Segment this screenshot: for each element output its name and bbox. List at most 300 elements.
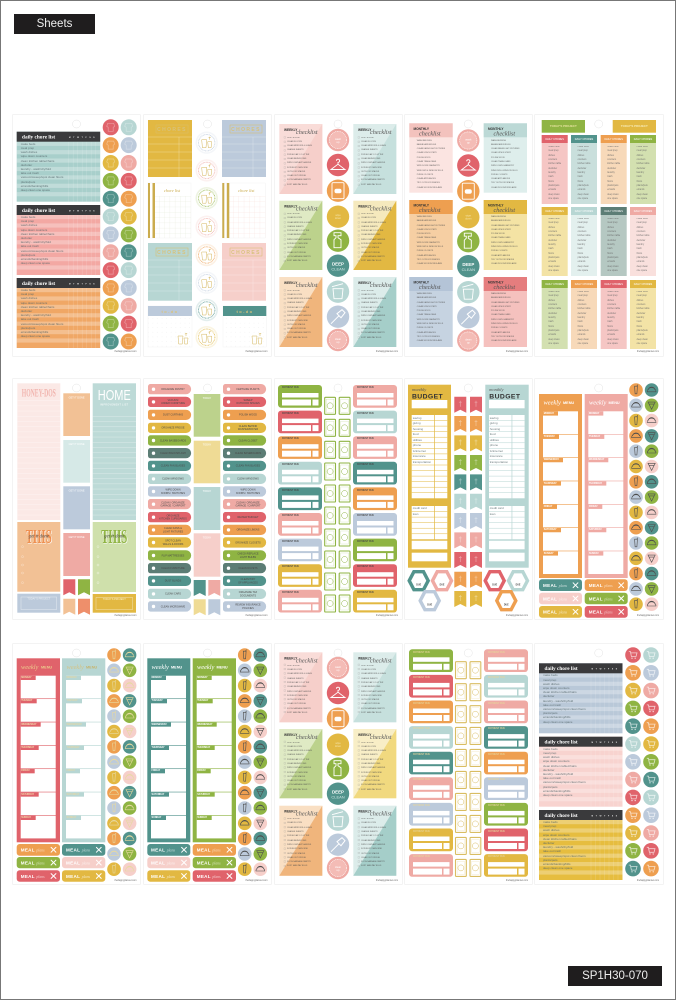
right pill labels: ORGANIZE TAX [239,591,258,594]
heading tag: Sheets: Sheets [37,18,72,30]
day labels: red: MONDAY TUESDAY WEDNESDAY THURSDAY FRIDAY SATURDAY SUNDAY [21,676,37,819]
checklist: teal [353,277,396,347]
stickers column: DEEP [332,262,344,266]
center today tags: TODAY [203,444,212,447]
artwork [16,648,137,882]
stickers column: clean [335,337,342,341]
daily chores columns: row 3: DAILY CHORES [634,283,653,286]
left pill labels: CLEAN FAN BLADES [161,465,186,468]
checklist: yellow: checklist [370,734,392,741]
chore list: light pink [539,737,622,807]
chore list: pink: MTWTFSS [69,210,97,212]
daily chores columns: row 3: DAILY CHORES [575,283,594,286]
stickers column: wash [465,138,472,142]
stickers column: CLEAN [331,794,345,800]
right pill labels: LIGHT BULBS [240,556,256,559]
panel: teal budget: BUDGET [489,394,521,401]
menu panel: light teal: MENU [86,666,97,670]
meal plans labels: MEAL plans [21,874,45,879]
checklist: light teal [484,123,527,193]
stickers column: up [467,142,470,144]
panel: teal chores: CHORES [157,250,187,256]
meal plans labels: MEAL plans [66,860,90,866]
checklist: yellow: checklist [370,206,392,213]
right pill labels: KNOBS / SWITCHES [236,492,260,495]
daily list text: row 1 column 1: make beds meal prep dishes counters kitchen table declutter laundry trash floors plants/pets errands deep clean one space [548,146,561,200]
checklist text: teal: DUST HOUSE CLEAN FLOORS CLEAN MIRRORS & GLASS CHANGE SHEETS PURGE DAILY CLUTTER CLEAN BATHROOMS WIPE DOWN APPLIANCES SCRUB KITCHEN SINK OUTDOOR SPACES CLEAN OUT FRIDGE FOOD/GARBAGE PANTRY SORT MAIL/PAY BILLS [361,818,386,867]
menu panel: teal: weekly [152,664,169,671]
panel: home: IMPROVEMENT LIST [100,404,129,406]
left pill labels: CLEAN / ORGANIZE [161,501,185,504]
hexagon due stickers: DUE [504,604,509,606]
checklist text: red: WASH BEDDING BASEBOARDS/RUGS CLEAN FANS/LIGHT FIXTURES CLEAN UPHOLSTERY POLISH WOOD CLEAN TRASH CANS WIPE DOWN CABINETRY WINDOWS & WINDOW SILLS PURGE CLOSETS CLEAN APPLIANCES TIDY OUTDOOR SPACES CLEAN WOODWORK/LAWN [491,293,519,342]
daily list text: row 3 column 4: make beds meal prep dishes counters kitchen table declutter laundry trash floors plants/pets errands deep clean one space [637,291,650,345]
daily chores columns: row 1: DAILY CHORES [605,138,623,141]
checklist text: yellow: WASH BEDDING BASEBOARDS/RUGS CLEAN FANS/LIGHT FIXTURES CLEAN UPHOLSTERY POLISH WOOD CLEAN TRASH CANS WIPE DOWN CABINETRY WINDOWS & WINDOW SILLS PURGE CLOSETS CLEAN APPLIANCES TIDY OUTDOOR SPACES CLEAN WOODWORK/LAWN [491,216,519,265]
artwork: thehappyplanner.com [506,614,528,617]
menu panel: green [193,658,236,842]
stickers column: clean [335,865,342,869]
checklist: teal: checklist [370,811,392,818]
checklist: orange: checklist [296,282,318,289]
stickers column: wipe [335,741,341,745]
daily list text: row 3 column 2: make beds meal prep dishes counters kitchen table declutter laundry trash floors plants/pets errands deep clean one space [578,291,590,345]
payment cards [278,385,397,612]
sheet 11: weekly menu red and light teal with gold [13,644,140,884]
right pill labels: CLEAN BASEBOARDS [235,452,261,455]
checklist: pink [279,124,322,194]
meal plans labels: MEAL plans [589,583,613,588]
checklist: light teal [353,124,396,194]
right pill labels: ORGANIZE CLOSETS [235,541,261,544]
checklist text: orange: WASH BEDDING BASEBOARDS/RUGS CLEAN FANS/LIGHT FIXTURES CLEAN UPHOLSTERY POLISH WOOD CLEAN TRASH CANS WIPE DOWN CABINETRY WINDOWS & WINDOW SILLS PURGE CLOSETS CLEAN APPLIANCES TIDY OUTDOOR SPACES CLEAN WOODWORK/LAWN [417,216,445,265]
checklist: blue: MONTHLY [414,281,430,285]
chore text: pink list: make beds meal prep wash dishes wipe down counters clean kitchen table/chairs declutter laundry - wash/dry/fold take out trash vacuum/sweep/spot clean floors plants/pets errands/banking/bills deep clean one space [543,747,586,797]
gold money tickets [456,662,481,876]
meal stickers [238,648,267,876]
menu panel: light teal: weekly [66,664,84,671]
artwork: thehappyplanner.com [246,879,268,882]
chore list: pink: daily chore list [22,208,55,214]
panel: teal header dotted note: to-do [236,309,254,314]
checklist: orange [279,806,322,876]
meal plans labels: MEAL plans [21,848,45,853]
artwork: thehappyplanner.com [376,879,398,882]
artwork: thehappyplanner.com [506,879,528,882]
left pill labels: CLEAN BASEBOARDS [160,439,186,442]
daily chores columns: row 3: DAILY CHORES [546,283,564,286]
today's project labels: TODAY'S PROJECT [550,124,577,128]
checklist: green: checklist [296,734,318,741]
checklist: light teal: checklist [370,657,392,664]
sheet 5: today's project and daily chores columns [535,115,662,356]
left pill labels: CLEAN CARS [165,593,181,596]
right pill labels: CLEAN DUVETS [238,567,258,570]
checklist: orange: MONTHLY [414,204,430,208]
checklist: yellow: checklist [494,207,515,214]
left pill labels: CLEAN FANS & [164,527,182,530]
sheet 13: weekly checklists, second set [275,644,402,884]
checklist: pink: checklist [419,130,441,138]
artwork [539,383,659,618]
left pill labels: WALLS & DOORS [163,543,184,546]
left pill labels: ORGANIZE FRIDGE [161,427,185,430]
sheet 1: daily chore lists with stickers [13,115,140,356]
stickers column: DEEP [332,790,344,794]
budget items: teal: saving giving housing food utilities phone tv/internet insurance transportation [490,416,508,464]
checklist text: yellow: DUST HOUSE CLEAN FLOORS CLEAN MIRRORS & GLASS CHANGE SHEETS PURGE DAILY CLUTTER CLEAN BATHROOMS WIPE DOWN APPLIANCES SCRUB KITCHEN SINK OUTDOOR SPACES CLEAN OUT FRIDGE FOOD/GARBAGE PANTRY SORT MAIL/PAY BILLS [361,213,386,262]
meal plans labels: MEAL plans [543,596,567,601]
right pill labels: REVIEW BUDGET [238,516,259,519]
panel: green this [93,522,136,592]
artwork: thehappyplanner.com [376,350,398,353]
sticker circles [103,119,137,350]
checklist text: orange: DUST HOUSE CLEAN FLOORS CLEAN MIRRORS & GLASS CHANGE SHEETS PURGE DAILY CLUTTER CLEAN BATHROOMS WIPE DOWN APPLIANCES SCRUB KITCHEN SINK OUTDOOR SPACES CLEAN OUT FRIDGE FOOD/GARBAGE PANTRY SORT MAIL/PAY BILLS [287,290,312,339]
stickers column: CLEAN [331,266,345,272]
meal plans labels: MEAL plans [543,610,567,615]
panel: yellow today's project [93,594,136,613]
artwork [279,120,398,353]
panel: pink grid chore list: chore list [238,188,255,193]
right pill labels: REVIEW INSURANCE [235,604,261,607]
left pill labels: KNOBS / SWITCHES [161,492,185,495]
right pill labels: POLICIES [242,607,254,610]
panel: honey-dos [17,383,60,520]
left pill labels: CLEAN MICROWAVE [161,605,186,608]
meal plans labels: MEAL plans [151,848,175,853]
chore list: teal [17,132,100,202]
artwork [542,120,659,353]
meal plans labels: MEAL plans [21,860,45,866]
artwork [279,648,398,882]
panel: orange this: THIS [26,526,52,548]
left pill labels: DUST CURTAINS [163,414,183,417]
left pill labels: CLEAN BACKSPLASH [160,452,186,455]
checklist: light teal: checklist [494,130,515,138]
right pill labels: WASHER/DRYER [238,428,258,431]
daily chores columns: row 2: DAILY CHORES [634,210,653,213]
left pill labels: WIPE DOWN [166,489,181,492]
left pill labels: LIGHT FIXTURES [163,530,184,533]
flag stickers [63,579,90,615]
checklist: orange [409,200,453,270]
checklist: teal: checklist [370,282,392,289]
right pill labels: OF APPLIANCES [238,581,258,584]
today's project labels: TODAY'S PROJECT [621,124,648,128]
left pill labels: CLEAN FURNITURE [161,567,185,570]
artwork: thehappyplanner.com [637,879,659,882]
menu panel: orange: weekly [544,400,561,406]
checklist text: blue: WASH BEDDING BASEBOARDS/RUGS CLEAN FANS/LIGHT FIXTURES CLEAN UPHOLSTERY POLISH WOOD CLEAN TRASH CANS WIPE DOWN CABINETRY WINDOWS & WINDOW SILLS PURGE CLOSETS CLEAN APPLIANCES TIDY OUTDOOR SPACES CLEAN WOODWORK/LAWN [417,293,445,342]
checklist: teal: WEEKLY [358,810,372,814]
chore text: yellow list: make beds meal prep wash dishes wipe down counters clean kitchen table/chairs declutter laundry - wash/dry/fold take out trash vacuum/sweep/spot clean floors plants/pets errands/banking/bills deep clean one space [543,820,586,870]
sheet 2: chores panels and round stickers [144,115,271,356]
menu panel: orange [539,394,582,578]
right pill labels: CLEAN/TIDY [241,578,256,581]
sheet 9: monthly budget [405,379,532,619]
checklist: red: MONTHLY [488,281,504,285]
checklist: blue [409,277,453,347]
payment labels: left: PAYMENT DUE PAYMENT DUE PAYMENT DUE PAYMENT DUE PAYMENT DUE PAYMENT DUE PAYMENT DUE PAYMENT DUE PAYMENT DUE [413,650,430,858]
daily chores columns: row 1: DAILY CHORES [634,138,653,141]
left pill labels: CLEAN WINDOWS [162,478,184,481]
artwork [17,383,137,617]
panel: yellow chores [148,120,192,177]
panel: blue today's project: TODAY'S PROJECT [27,598,51,600]
menu panel: pink: MENU [608,401,620,405]
checklist: green [279,729,322,798]
sheet 7: task pill labels [144,379,271,619]
panel: blue today's project [17,594,60,613]
checklist text: pink: DUST HOUSE CLEAN FLOORS CLEAN MIRRORS & GLASS CHANGE SHEETS PURGE DAILY CLUTTER CLEAN BATHROOMS WIPE DOWN APPLIANCES SCRUB KITCHEN SINK OUTDOOR SPACES CLEAN OUT FRIDGE FOOD/GARBAGE PANTRY SORT MAIL/PAY BILLS [287,136,312,186]
menu panel: light teal [62,658,105,842]
right pill labels: GARAGE / CARPORT [236,505,261,508]
checklist text: yellow: DUST HOUSE CLEAN FLOORS CLEAN MIRRORS & GLASS CHANGE SHEETS PURGE DAILY CLUTTER CLEAN BATHROOMS WIPE DOWN APPLIANCES SCRUB KITCHEN SINK OUTDOOR SPACES CLEAN OUT FRIDGE FOOD/GARBAGE PANTRY SORT MAIL/PAY BILLS [361,742,386,791]
product code tag: SP1H30-070 [582,970,648,982]
chore list: teal: MTWTFSS [69,137,97,139]
meal plans labels: MEAL plans [543,583,567,588]
get it done tags [63,393,90,576]
left pill labels [159,388,187,608]
artwork: thehappyplanner.com [115,879,137,882]
menu panel: red: MENU [41,666,52,670]
artwork: thehappyplanner.com [115,350,137,353]
chore list: teal: daily chore list [22,135,55,141]
stickers column: clean [465,338,472,342]
money tickets [325,397,350,612]
meal stickers with gold icons [107,648,136,876]
get it done tags: GET IT DONE [69,490,85,492]
sheet 10: weekly menu orange and pink [535,379,662,619]
left pill labels: SPOT CLEAN [165,540,181,543]
sheet 12: weekly menu teal and green [144,644,271,884]
left pill labels: ORGANIZE PANTRY [161,388,185,391]
debt items: teal: credit card loan [490,506,504,516]
checklist: green [279,201,322,270]
chore list: pink [17,205,100,275]
panel: green grid chore list: chore list [164,188,181,193]
checklist: orange: WEEKLY [284,810,298,814]
checklist text: pink: WASH BEDDING BASEBOARDS/RUGS CLEAN FANS/LIGHT FIXTURES CLEAN UPHOLSTERY POLISH WOOD CLEAN TRASH CANS WIPE DOWN CABINETRY WINDOWS & WINDOW SILLS PURGE CLOSETS CLEAN APPLIANCES TIDY OUTDOOR SPACES CLEAN WOODWORK/LAWN [417,140,445,189]
flag stickers [194,580,220,615]
panel: orange this: THIS [26,526,52,548]
checklist text: green: DUST HOUSE CLEAN FLOORS CLEAN MIRRORS & GLASS CHANGE SHEETS PURGE DAILY CLUTTER CLEAN BATHROOMS WIPE DOWN APPLIANCES SCRUB KITCHEN SINK OUTDOOR SPACES CLEAN OUT FRIDGE FOOD/GARBAGE PANTRY SORT MAIL/PAY BILLS [287,213,312,262]
panel: teal budget [485,385,529,568]
right pill labels: SWEEP [243,399,253,402]
stickers column: down [465,216,472,220]
right pill labels: OUTDOOR SPACES [236,402,260,405]
artwork [539,647,659,882]
checklist: pink: checklist [296,657,318,664]
checklist text: light teal: DUST HOUSE CLEAN FLOORS CLEAN MIRRORS & GLASS CHANGE SHEETS PURGE DAILY CLUTTER CLEAN BATHROOMS WIPE DOWN APPLIANCES SCRUB KITCHEN SINK OUTDOOR SPACES CLEAN OUT FRIDGE FOOD/GARBAGE PANTRY SORT MAIL/PAY BILLS [361,665,386,714]
meal plans labels: MEAL plans [197,860,221,866]
panel: green grid chore list [148,183,191,238]
chore list: light pink: MTWTFSS [592,742,620,744]
checklist: green: WEEKLY [284,733,298,737]
panel: blue chores [222,120,266,177]
panel: pink grid chore list [222,183,265,238]
daily chores columns: row 2 [542,207,656,276]
menu panel: red [17,658,60,842]
round gold stickers [196,132,218,348]
left pills [148,384,191,612]
panel: yellow today's project: TODAY'S PROJECT [103,598,126,601]
panel: teal chores [148,243,192,301]
hexagon due stickers: DUE [440,584,445,586]
stickers column: down [335,744,342,748]
checklist: light teal: WEEKLY [358,128,372,132]
meal plans labels [17,844,105,882]
checklist text: light teal: DUST HOUSE CLEAN FLOORS CLEAN MIRRORS & GLASS CHANGE SHEETS PURGE DAILY CLUTTER CLEAN BATHROOMS WIPE DOWN APPLIANCES SCRUB KITCHEN SINK OUTDOOR SPACES CLEAN OUT FRIDGE FOOD/GARBAGE PANTRY SORT MAIL/PAY BILLS [361,136,386,186]
daily chores columns: row 2: DAILY CHORES [546,210,564,213]
artwork: thehappyplanner.com [246,614,268,617]
center today tags: TODAY [203,397,212,400]
meal plans labels: MEAL plans [589,610,613,615]
panel: honey-dos: HONEY-DOS [22,386,56,400]
panel: yellow budget [408,385,451,568]
daily list text: row 2 column 1: make beds meal prep dishes counters kitchen table declutter laundry trash floors plants/pets errands deep clean one space [548,218,561,272]
right pill labels: CLEAN / ORGANIZE [236,501,260,504]
menu panel: pink: weekly [589,400,607,406]
panel: orange this [17,522,60,592]
payment labels: left: PAYMENT DUE PAYMENT DUE PAYMENT DUE PAYMENT DUE PAYMENT DUE PAYMENT DUE PAYMENT DUE PAYMENT DUE PAYMENT DUE [282,386,299,594]
meal stickers [629,383,658,611]
debt items: yellow: credit card loan [413,506,427,516]
panel: teal budget: monthly [489,387,503,392]
panel: yellow budget: BUDGET [412,394,444,401]
checklist: green: WEEKLY [284,205,298,209]
sheet 14: payment due cards with gold [405,644,532,884]
day labels: teal: MONDAY TUESDAY WEDNESDAY THURSDAY FRIDAY SATURDAY SUNDAY [152,676,167,819]
sheet 8: payment due cards [275,379,402,619]
artwork [148,120,268,353]
checklist: pink [409,123,453,193]
chore list: yellow: MTWTFSS [592,815,620,817]
checklist: orange: WEEKLY [284,281,298,285]
right pill labels: DOCUMENTS [240,594,256,597]
meal plans labels: MEAL plans [197,874,221,879]
chore list: blue [539,663,622,733]
daily chores columns: row 1 [542,135,656,204]
menu panel: pink [585,394,628,578]
stickers column: wipe [466,214,472,218]
right pill labels: CLEAN FAN BLADES [236,465,261,468]
chore text: pink list: make beds meal prep wash dishes wipe down counters clean kitchen table/chairs declutter laundry - wash/dry/fold take out trash vacuum/sweep/spot clean floors plants/pets errands/banking/bills deep clean one space [21,215,63,265]
cart stickers [625,647,659,876]
daily list text: row 2 column 3: make beds meal prep dishes counters kitchen table declutter laundry trash floors plants/pets errands deep clean one space [607,218,620,272]
checklist text: orange: DUST HOUSE CLEAN FLOORS CLEAN MIRRORS & GLASS CHANGE SHEETS PURGE DAILY CLUTTER CLEAN BATHROOMS WIPE DOWN APPLIANCES SCRUB KITCHEN SINK OUTDOOR SPACES CLEAN OUT FRIDGE FOOD/GARBAGE PANTRY SORT MAIL/PAY BILLS [287,818,312,867]
stickers column: wash [335,137,342,141]
chore text: teal list: make beds meal prep wash dishes wipe down counters clean kitchen table/chairs declutter laundry - wash/dry/fold take out trash vacuum/sweep/spot clean floors plants/pets errands/banking/bills deep clean one space [21,142,63,192]
left pill labels: UNDER FURNITURE [161,402,185,405]
hexagon due stickers: DUE [492,584,498,586]
artwork [16,119,137,353]
meal plans labels: MEAL plans [151,860,175,866]
chore list: blue: daily chore list [544,666,578,672]
daily list text: row 3 column 1: make beds meal prep dishes counters kitchen table declutter laundry trash floors plants/pets errands deep clean one space [548,291,561,345]
stickers column: up [337,669,340,672]
checklist: yellow [353,201,396,270]
get it done tags: GET IT DONE [69,536,85,539]
checklist: pink: MONTHLY [414,127,430,131]
payment cards [409,649,528,877]
right pill labels: POLISH WOOD [239,414,257,417]
left pill labels: ORGANIZE [166,514,180,517]
menu panel: green: weekly [197,664,215,671]
hexagon due stickers: DUE [516,584,521,586]
sheet 6: honey-dos and home [13,379,140,619]
chore text: orange list: make beds meal prep wash dishes wipe down counters clean kitchen table/chairs declutter laundry - wash/dry/fold take out trash vacuum/sweep/spot clean floors plants/pets errands/banking/bills deep clean one space [21,288,63,338]
get it done tags: GET IT DONE [69,396,85,400]
checklist: light teal: MONTHLY [488,127,504,131]
day labels: light teal: MONDAY TUESDAY WEDNESDAY THURSDAY FRIDAY SATURDAY SUNDAY [66,676,82,819]
meal plans labels: MEAL plans [151,874,175,879]
panel: yellow chores: CHORES [157,127,187,133]
stickers column: CLEAN [462,267,475,272]
daily chores columns: row 2: DAILY CHORES [605,210,623,213]
right pill labels: ORGANIZE LINENS [237,529,260,532]
panel: orange this: get it done [29,534,50,540]
stickers column: up [337,141,340,144]
panel: blue chores: CHORES [231,127,261,133]
sheet 15: daily chore lists with cart stickers [535,644,662,884]
artwork [147,648,268,882]
right pill labels [235,388,261,610]
panel: blue header dotted note [148,306,192,347]
menu panel: green: MENU [216,666,228,670]
center today tags: TODAY [203,536,212,539]
checklist: yellow: WEEKLY [358,733,372,737]
daily list text: row 1 column 2: make beds meal prep dishes counters kitchen table declutter laundry trash floors plants/pets errands deep clean one space [578,146,590,200]
artwork: thehappyplanner.com [637,614,659,617]
panel: pink chores: CHORES [231,250,261,256]
stickers column: wash [335,665,342,669]
artwork [409,648,528,882]
checklist: pink: checklist [296,129,318,136]
day labels: green: MONDAY TUESDAY WEDNESDAY THURSDAY FRIDAY SATURDAY SUNDAY [197,676,213,819]
artwork [407,384,530,617]
daily list text: row 2 column 2: make beds meal prep dishes counters kitchen table declutter laundry trash floors plants/pets errands deep clean one space [578,218,590,272]
artwork: thehappyplanner.com [115,614,137,617]
center today tags: TODAY [203,490,212,493]
checklist: yellow: MONTHLY [488,204,504,208]
daily list text: row 2 column 4: make beds meal prep dishes counters kitchen table declutter laundry trash floors plants/pets errands deep clean one space [637,218,650,272]
meal plans labels: MEAL plans [66,848,90,853]
artwork: thehappyplanner.com [506,350,528,353]
sheet 3: weekly checklists with stickers [275,115,402,356]
day labels: pink: MONDAY TUESDAY WEDNESDAY THURSDAY FRIDAY SATURDAY SUNDAY [589,412,604,555]
heading tag: Sheets [14,14,95,34]
daily list text: row 1 column 4: make beds meal prep dishes counters kitchen table declutter laundry trash floors plants/pets errands deep clean one space [637,146,650,200]
stickers column: down [335,216,342,220]
daily list text: row 3 column 3: make beds meal prep dishes counters kitchen table declutter laundry trash floors plants/pets errands deep clean one space [607,291,620,345]
left pill labels: DUST BLINDS [165,580,182,583]
left pill labels: FLIP MATTRESSES [162,554,185,557]
checklist: yellow [353,729,396,798]
menu panel: teal: MENU [171,666,182,670]
right pill labels: CHECK/REPLACE [237,553,259,556]
artwork [278,384,398,617]
chore list: yellow: daily chore list [544,813,578,819]
checklist: orange: checklist [419,207,441,214]
left pill labels: KITCHEN CUPBOARDS [159,518,187,521]
checklist: pink: WEEKLY [284,656,298,660]
checklist: teal: WEEKLY [358,281,372,285]
stickers column [327,129,349,351]
artwork: thehappyplanner.com [637,350,659,353]
center today tags [194,394,220,577]
menu panel: teal [147,658,190,842]
